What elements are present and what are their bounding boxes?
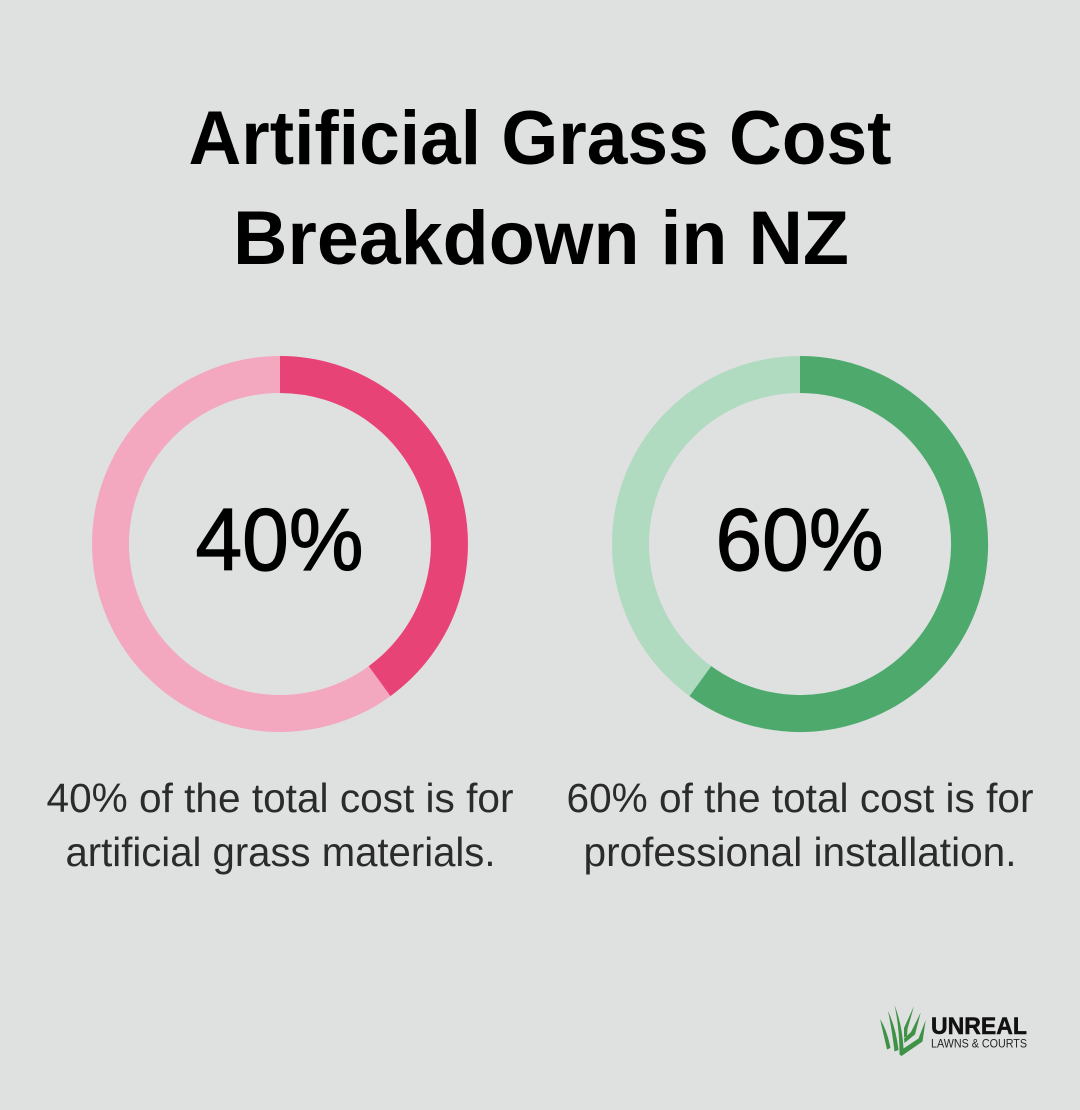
description: materials: artificial grass materials. [66, 829, 496, 875]
wordmark: UNREAL [931, 1013, 1027, 1040]
logo: Unreal Lawns & Courts [880, 1005, 1027, 1056]
title [188, 96, 892, 281]
donut chart: 40 percent [110, 374, 450, 714]
panel: installation 60% [566, 374, 1034, 875]
title: Breakdown in NZ [233, 196, 849, 281]
icon: grass [880, 1005, 926, 1056]
donut chart: 60 percent [630, 374, 970, 714]
description: materials [46, 775, 514, 875]
description: installation: professional installation. [584, 829, 1016, 875]
title: Artificial Grass Cost [188, 96, 892, 181]
description: materials: 40% of the total cost is for [46, 775, 514, 821]
value: 40%: 40% [196, 490, 364, 589]
description: installation: 60% of the total cost is for [566, 775, 1034, 821]
tagline: LAWNS & COURTS [931, 1036, 1027, 1050]
value: 60%: 60% [716, 490, 884, 589]
description: installation [566, 775, 1034, 875]
panel: materials 40% [46, 374, 514, 875]
